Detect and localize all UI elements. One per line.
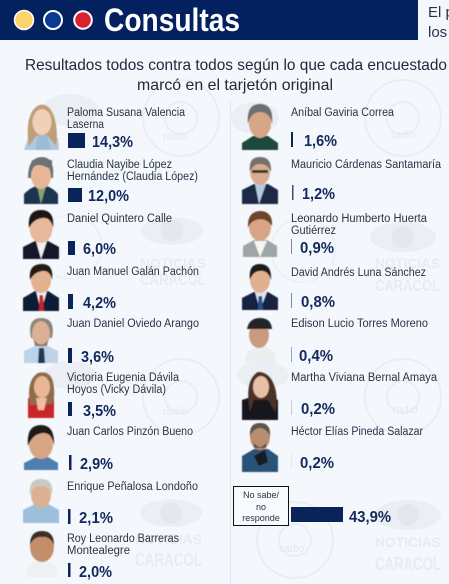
candidate: Paloma Valencia [24,104,186,151]
candidate: Vicky Dávila [28,372,180,420]
bar [291,507,343,522]
value: 12,0% [88,188,129,205]
bar [291,239,292,254]
candidate: Edison Torres [244,318,428,365]
value: 3,5% [83,403,116,420]
bar [69,455,72,470]
cropped side note [428,4,449,41]
watermarks: Noticias Caracol and radio logos: NOTICIAS [375,255,440,271]
value: 0,2% [300,455,334,472]
bar [68,188,82,202]
bar [291,400,292,415]
bar [68,509,70,524]
label text: No sabe/ [243,490,280,500]
bar [291,347,292,362]
watermarks: Noticias Caracol and radio logos: NOTICIAS [375,534,441,550]
portrait [24,425,58,470]
subtitle [25,57,447,94]
watermarks: Noticias Caracol and radio logos: radio [163,131,187,143]
icon: blue dot [44,11,62,29]
value: 1,2% [302,186,335,203]
candidate: David Luna [242,264,426,311]
candidate: Claudia López [24,157,198,205]
value: 14,3% [92,134,133,151]
icon: red dot [74,11,92,29]
value: 43,9% [349,509,391,526]
watermarks: Noticias Caracol and radio logos: CARACOL [135,550,202,570]
portrait [23,264,59,311]
portrait [242,264,278,310]
watermarks: Noticias Caracol and radio logos: CARACOL [140,272,206,289]
icon: yellow dot [14,10,34,30]
portrait [242,372,278,420]
candidate: Héctor Pineda [242,423,423,472]
candidate: Martha Bernal [242,372,438,420]
watermarks: Noticias Caracol and radio logos: radio [163,406,187,418]
name: Héctor Elías Pineda Salazar [291,426,423,438]
candidate: Roy Barreras [26,531,179,581]
name: Claudia Nayibe López [67,159,172,171]
candidate: Juan Daniel Oviedo [24,318,199,366]
candidate: Juan Manuel Galán [23,264,199,312]
name: Leonardo Humberto Huerta [291,213,428,225]
candidate: Vicky Dávila: Hoyos (Vicky Dávila) [67,384,166,396]
value: 0,8% [301,294,335,311]
value: 1,6% [304,133,337,150]
watermarks: Noticias Caracol and radio logos: NOTICIAS [140,255,206,271]
name: Juan Carlos Pinzón Bueno [67,426,193,438]
subtitle: marcó en el tarjetón original [137,77,333,94]
portrait [242,104,278,150]
bar [291,132,293,147]
bar [68,133,85,148]
watermarks: Noticias Caracol and radio logos: radio [280,543,304,555]
candidate: Juan Carlos Pinzón [24,425,193,473]
candidate: Roy Barreras: Montealegre [67,545,130,557]
watermarks: Noticias Caracol and radio logos: radio [393,404,417,416]
label text [242,490,280,523]
portrait [242,157,278,204]
value: 3,6% [81,349,114,366]
name: Roy Leonardo Barreras [67,533,179,545]
value: 0,9% [300,240,334,257]
portrait [244,318,276,363]
name: Martha Viviana Bernal Amaya [291,372,438,384]
name: Daniel Quintero Calle [67,213,172,225]
candidate: Leonardo Huerta: Gutiérrez [291,225,336,237]
portrait [23,210,59,259]
name: Paloma Susana Valencia [67,107,186,119]
bar [292,185,294,200]
value: 4,2% [83,295,116,312]
candidate: Mauricio Cárdenas [242,157,442,204]
label text: responde [242,513,280,523]
name: David Andrés Luna Sánchez [291,267,426,279]
label box [234,486,288,526]
bar [291,454,292,469]
portrait [242,423,278,472]
label text: no [256,502,266,512]
name: Enrique Peñalosa Londoño [67,481,198,493]
heading: Consultas [104,2,240,38]
candidate: Leonardo Huerta [243,211,428,257]
bar [291,293,292,308]
bar [68,241,75,255]
column divider [230,100,231,584]
cropped side note: los [428,24,447,41]
portrait [26,531,58,577]
value: 2,1% [79,510,113,527]
bar [68,348,72,363]
watermarks: Noticias Caracol and radio logos [38,80,441,578]
value: 0,2% [301,401,335,418]
bar [68,402,72,416]
candidate: Aníbal Gaviria [242,104,395,150]
no sabe / no responde [234,486,391,526]
name: Juan Manuel Galán Pachón [67,266,199,278]
portrait [24,104,59,150]
value: 6,0% [83,241,116,258]
portrait [243,211,277,257]
portrait [28,372,54,418]
watermarks: Noticias Caracol and radio logos: radio [391,129,415,141]
name: Mauricio Cárdenas Santamaría [291,159,442,171]
candidate: Enrique Peñalosa [23,479,198,527]
watermarks: Noticias Caracol and radio logos: NOTICIAS [135,531,202,547]
header band [0,0,418,40]
candidate: Claudia López: Hernández (Claudia López) [67,171,198,183]
bar [68,563,70,577]
value: 2,0% [79,564,112,581]
portrait [23,479,59,523]
name: Aníbal Gaviria Correa [291,107,395,119]
name: Edison Lucio Torres Moreno [291,318,428,330]
portrait [24,157,58,204]
candidate: Daniel Quintero [23,210,172,259]
value: 0,4% [299,348,333,365]
name: Juan Daniel Oviedo Arango [67,318,199,330]
candidate: Paloma Valencia: Laserna [67,119,105,131]
value: 2,9% [80,456,113,473]
portrait [24,318,58,363]
bar [68,294,73,309]
name: Victoria Eugenia Dávila [67,372,180,384]
